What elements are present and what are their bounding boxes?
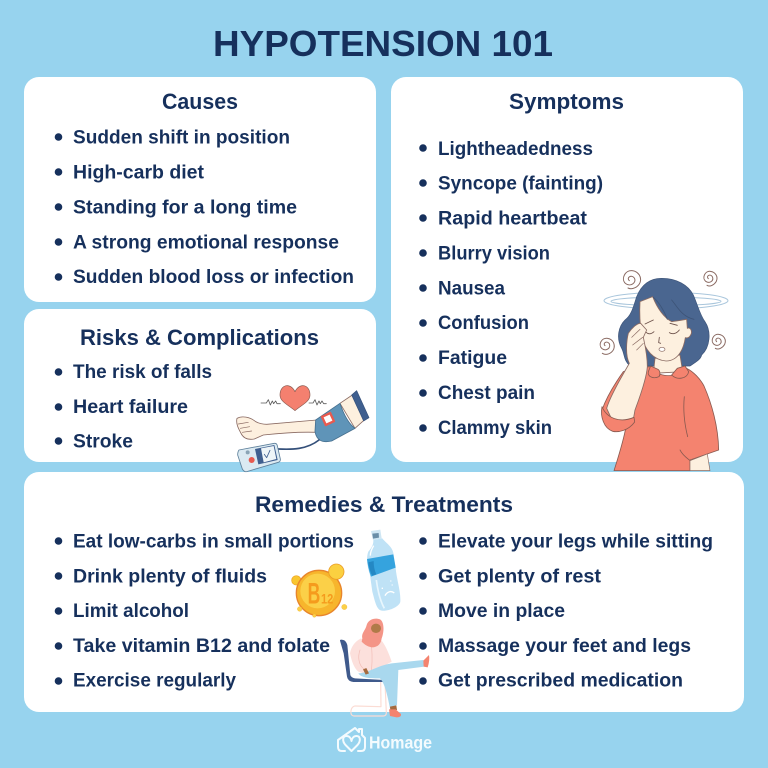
list: symptoms: Chest pain — [438, 382, 535, 404]
icon: house with heart — [338, 728, 365, 751]
list: causes: Sudden shift in position — [73, 126, 290, 148]
list: risks: Heart failure — [73, 396, 188, 418]
heading: remedies and treatments: Remedies & Treatments — [255, 492, 513, 517]
list: symptoms: Fatigue — [438, 347, 507, 369]
list: remedies right column: Get plenty of rest — [438, 566, 602, 588]
list: symptoms: Confusion — [438, 312, 529, 334]
logo: Homage: Homage — [369, 732, 432, 752]
list: symptoms: Nausea — [438, 278, 505, 300]
illustration: vitamin B12: 12 — [321, 590, 333, 606]
list: symptoms — [419, 138, 603, 439]
list: remedies left column: Eat low-carbs in small portions — [73, 530, 354, 552]
list: risks: Stroke — [73, 430, 133, 452]
heading: risks and complications: Risks & Complications — [80, 325, 319, 350]
illustration: water bottle — [367, 530, 400, 611]
illustration: vitamin B12 — [292, 564, 347, 617]
list: symptoms: Syncope (fainting) — [438, 172, 603, 194]
panel: causes — [24, 77, 376, 302]
list: symptoms: Blurry vision — [438, 242, 550, 264]
list: causes: Sudden blood loss or infection — [73, 266, 354, 288]
list: remedies left column: Take vitamin B12 and folate — [73, 635, 330, 657]
list: causes: A strong emotional response — [73, 232, 339, 254]
list: remedies right column: Massage your feet and legs — [438, 635, 691, 657]
list: remedies right column: Move in place — [438, 600, 565, 622]
heading: symptoms: Symptoms — [509, 89, 624, 114]
list: remedies left column: Drink plenty of fluids — [73, 566, 267, 588]
list: symptoms: Rapid heartbeat — [438, 208, 588, 230]
title: HYPOTENSION 101 — [213, 23, 553, 64]
list: causes: High-carb diet — [73, 162, 205, 184]
list: remedies right column: Get prescribed medication — [438, 670, 683, 692]
list: remedies right column — [419, 530, 713, 692]
illustration: dizzy woman — [600, 271, 728, 471]
panel: symptoms — [391, 77, 743, 462]
heading: causes: Causes — [162, 89, 238, 114]
list: causes — [55, 126, 354, 288]
list: symptoms: Clammy skin — [438, 417, 552, 439]
list: risks: The risk of falls — [73, 361, 212, 383]
list: remedies right column: Elevate your legs while sitting — [438, 530, 713, 552]
illustration: seated woman raising leg — [340, 619, 429, 717]
logo: Homage — [338, 728, 432, 752]
panel: remedies and treatments — [24, 472, 744, 712]
illustration: vitamin B12: B — [308, 577, 320, 610]
panel: risks and complications — [24, 309, 376, 462]
list: causes: Standing for a long time — [73, 196, 297, 218]
list: symptoms: Lightheadedness — [438, 138, 593, 160]
list: remedies left column: Limit alcohol — [73, 600, 189, 622]
list: remedies left column: Exercise regularly — [73, 670, 236, 692]
illustration: blood pressure cuff and heart — [237, 386, 369, 472]
list: risks — [55, 361, 212, 452]
list: remedies left column — [55, 530, 354, 692]
